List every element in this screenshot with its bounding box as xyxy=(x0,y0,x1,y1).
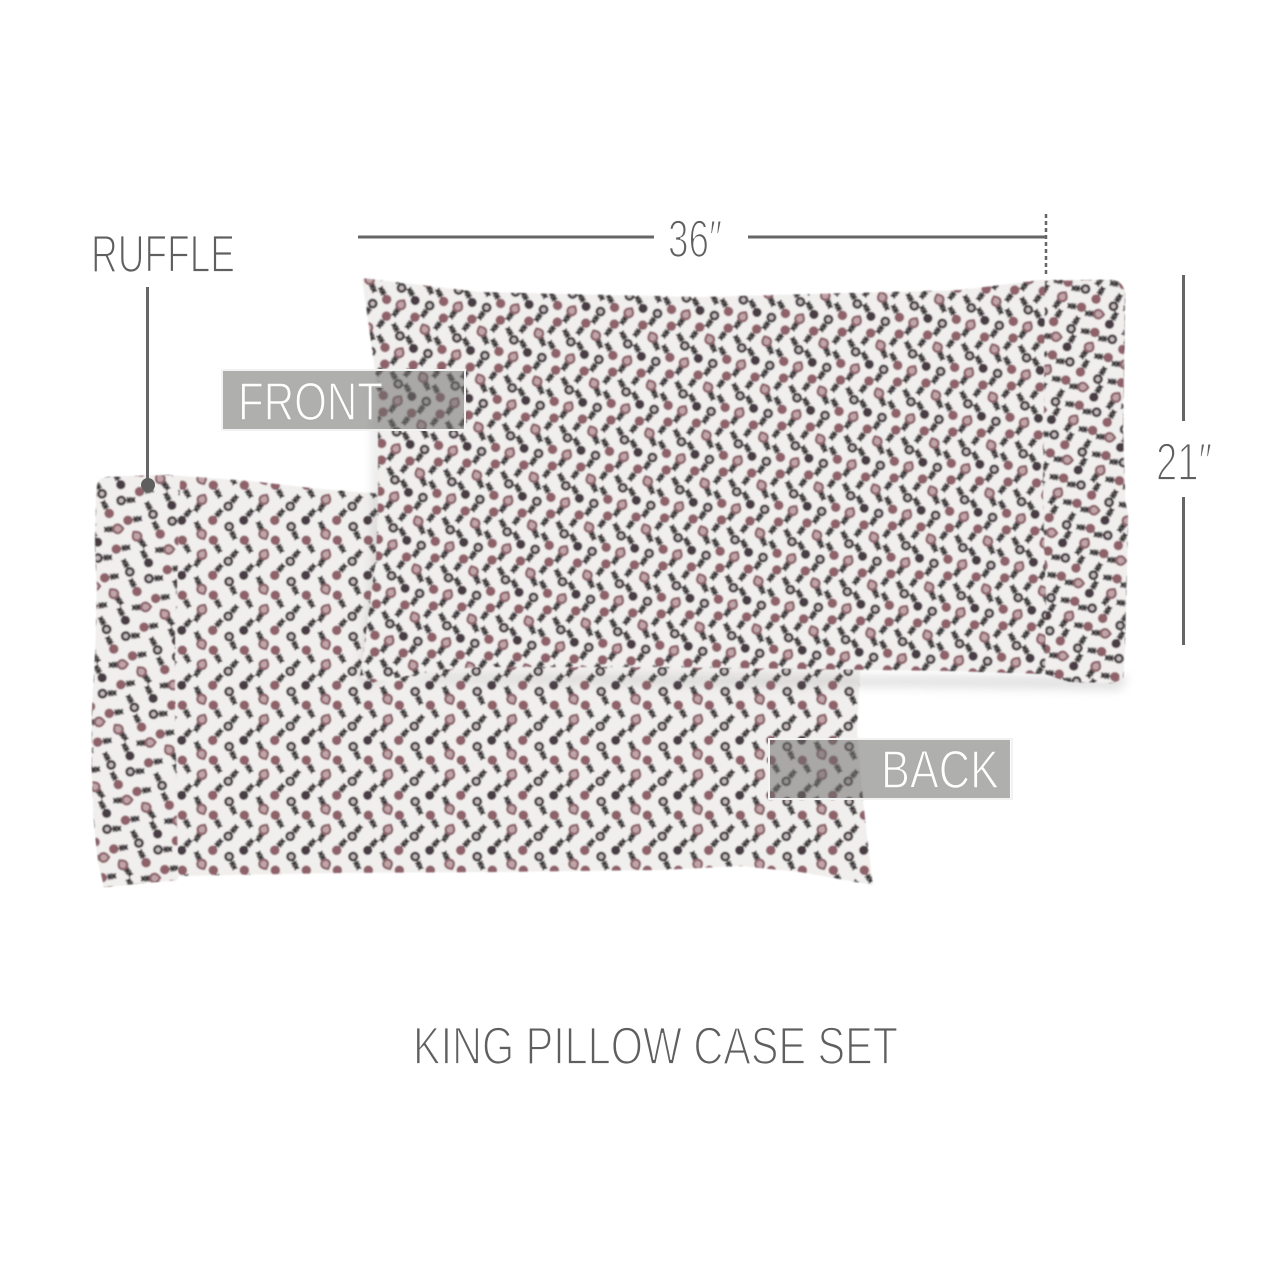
ruffle: back xyxy=(92,475,180,887)
dimension: width 36 inches xyxy=(358,210,1046,275)
dimension: height 21 inches: 21″ xyxy=(1156,433,1212,492)
label: BACK: BACK xyxy=(881,740,999,800)
label: FRONT: FRONT xyxy=(238,372,383,432)
pillow: back xyxy=(92,475,873,887)
pillow: front xyxy=(360,278,1128,690)
dimension: width 36 inches: 36″ xyxy=(668,210,722,269)
title: KING PILLOW CASE SET xyxy=(413,1017,898,1076)
dimension: height 21 inches xyxy=(1156,275,1212,645)
label: BACK xyxy=(769,739,1012,800)
ruffle: front xyxy=(1043,280,1128,683)
callout: RUFFLE xyxy=(91,225,235,492)
callout: RUFFLE: RUFFLE xyxy=(91,225,235,284)
